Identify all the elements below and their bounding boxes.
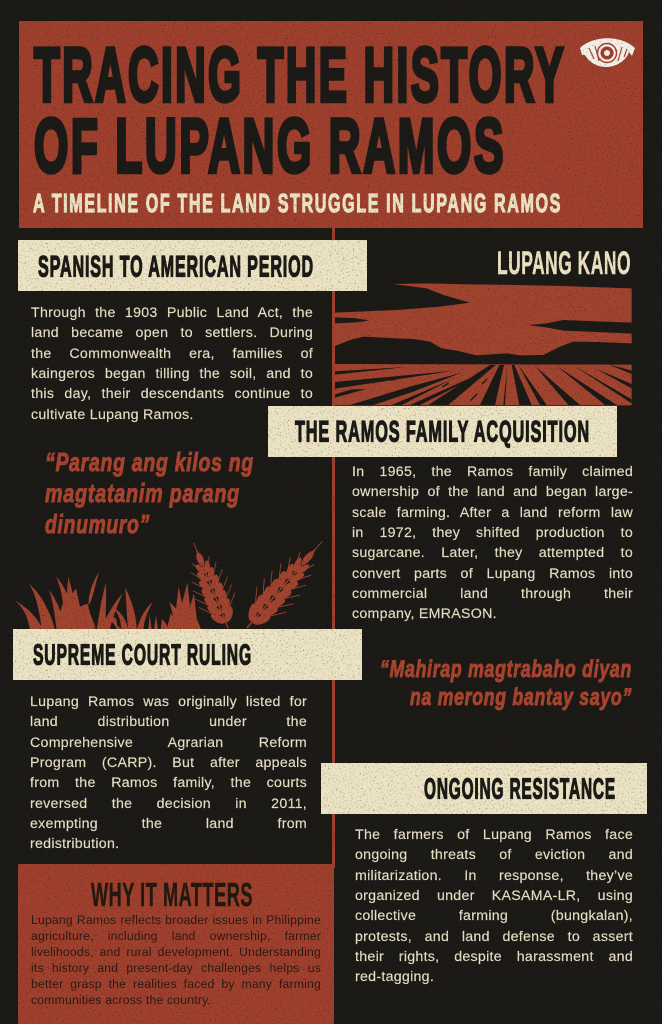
text block: spanish period: land became open to settlers. During	[31, 325, 313, 341]
quote: mahirap magtrabaho	[380, 656, 632, 711]
panel: ongoing resistance	[321, 763, 647, 814]
text block: agriculture, including land ownership, farmer	[31, 929, 321, 943]
sky	[335, 283, 632, 355]
panel: supreme court ruling	[13, 629, 362, 680]
text block: ongoing resistance: their rights, despite harassment and	[355, 949, 633, 965]
text block: supreme court: reversed the decision in 2011,	[30, 796, 307, 812]
text block: supreme court: Comprehensive Agrarian Reform	[30, 735, 307, 751]
text block: its history and present-day challenges helps us	[31, 961, 321, 975]
icon: eye logo	[580, 38, 635, 67]
title panel	[19, 21, 643, 228]
text block: spanish period: the Commonwealth era, families of	[31, 346, 313, 362]
text block: ongoing resistance: protests, and land defense to assert	[355, 929, 633, 945]
text block: ramos family: scale farming. After a land reform law	[352, 505, 633, 521]
text block: ongoing resistance	[355, 827, 633, 985]
heading: SUPREME COURT RULING	[33, 640, 252, 672]
grass	[15, 571, 201, 630]
text block: ramos family: in 1972, they shifted production to	[352, 525, 633, 541]
text block: better grasp the realities faced by many farming	[31, 977, 321, 991]
text block: spanish period	[31, 305, 313, 423]
panel: spanish to american period	[18, 240, 367, 291]
text block: supreme court: from the Ramos family, the courts	[30, 775, 307, 791]
furrows	[335, 364, 632, 405]
text block	[31, 913, 321, 1007]
field	[335, 364, 632, 405]
text block: communities across the country.	[31, 993, 211, 1007]
heading: WHY IT MATTERS	[91, 876, 253, 913]
text block: ongoing resistance: militarization. In response, they’ve	[355, 868, 633, 884]
text block: ramos family: company, EMRASON.	[352, 606, 497, 622]
panel: ramos family acquisition	[268, 406, 617, 457]
text block: ongoing resistance: organized under KASAMA-LR, using	[355, 888, 633, 904]
quote: parang ang kilos: dinumuro”	[45, 509, 150, 539]
text block: ramos family: convert parts of Lupang Ramos into	[352, 566, 633, 582]
quote: parang ang kilos: “Parang ang kilos ng	[45, 447, 254, 477]
text block: ramos family: commercial land through their	[352, 586, 633, 602]
wheat left	[176, 536, 246, 635]
text block: spanish period: kaingeros began tilling the soil, and to	[31, 366, 313, 382]
title	[33, 33, 566, 189]
text block: ramos family: sugarcane. Later, they attempted to	[352, 545, 633, 561]
text block: ongoing resistance: collective farming (bungkalan),	[355, 908, 633, 924]
text block: ongoing resistance: ongoing threats of eviction and	[355, 847, 633, 863]
text block: supreme court: exempting the land from	[30, 816, 307, 832]
text block: spanish period: cultivate Lupang Ramos.	[31, 407, 194, 423]
text block: ramos family	[352, 464, 633, 622]
text block: supreme court	[30, 694, 307, 852]
heading: SPANISH TO AMERICAN PERIOD	[38, 250, 314, 284]
timeline vertical line	[332, 228, 335, 868]
illustration: grass and wheat	[15, 541, 322, 629]
text block: Lupang Ramos reflects broader issues in Philippine	[31, 913, 321, 927]
text block: ongoing resistance: red-tagging.	[355, 969, 434, 985]
text block: ramos family: In 1965, the Ramos family claimed	[352, 464, 633, 480]
text block: livelihoods, and rural development. Understanding	[31, 945, 321, 959]
text block: supreme court: Program (CARP). But after appeals	[30, 755, 307, 771]
illustration: rice field landscape	[335, 283, 632, 406]
text block: supreme court: land distribution under the	[30, 714, 307, 730]
quote: parang ang kilos	[44, 447, 254, 539]
quote: parang ang kilos: magtatanim parang	[45, 478, 240, 508]
text block: supreme court: redistribution.	[30, 836, 119, 852]
panel: why it matters	[18, 864, 334, 1024]
text block: supreme court: Lupang Ramos was originally listed for	[30, 694, 307, 710]
text block: ongoing resistance: The farmers of Lupang Ramos face	[355, 827, 633, 843]
text block: ramos family: ownership of the land and began large-	[352, 484, 633, 500]
text block: spanish period: Through the 1903 Public Land Act, the	[31, 305, 313, 321]
text block: spanish period: this day, their descendants continue to	[31, 386, 313, 402]
wheat right	[232, 528, 337, 641]
